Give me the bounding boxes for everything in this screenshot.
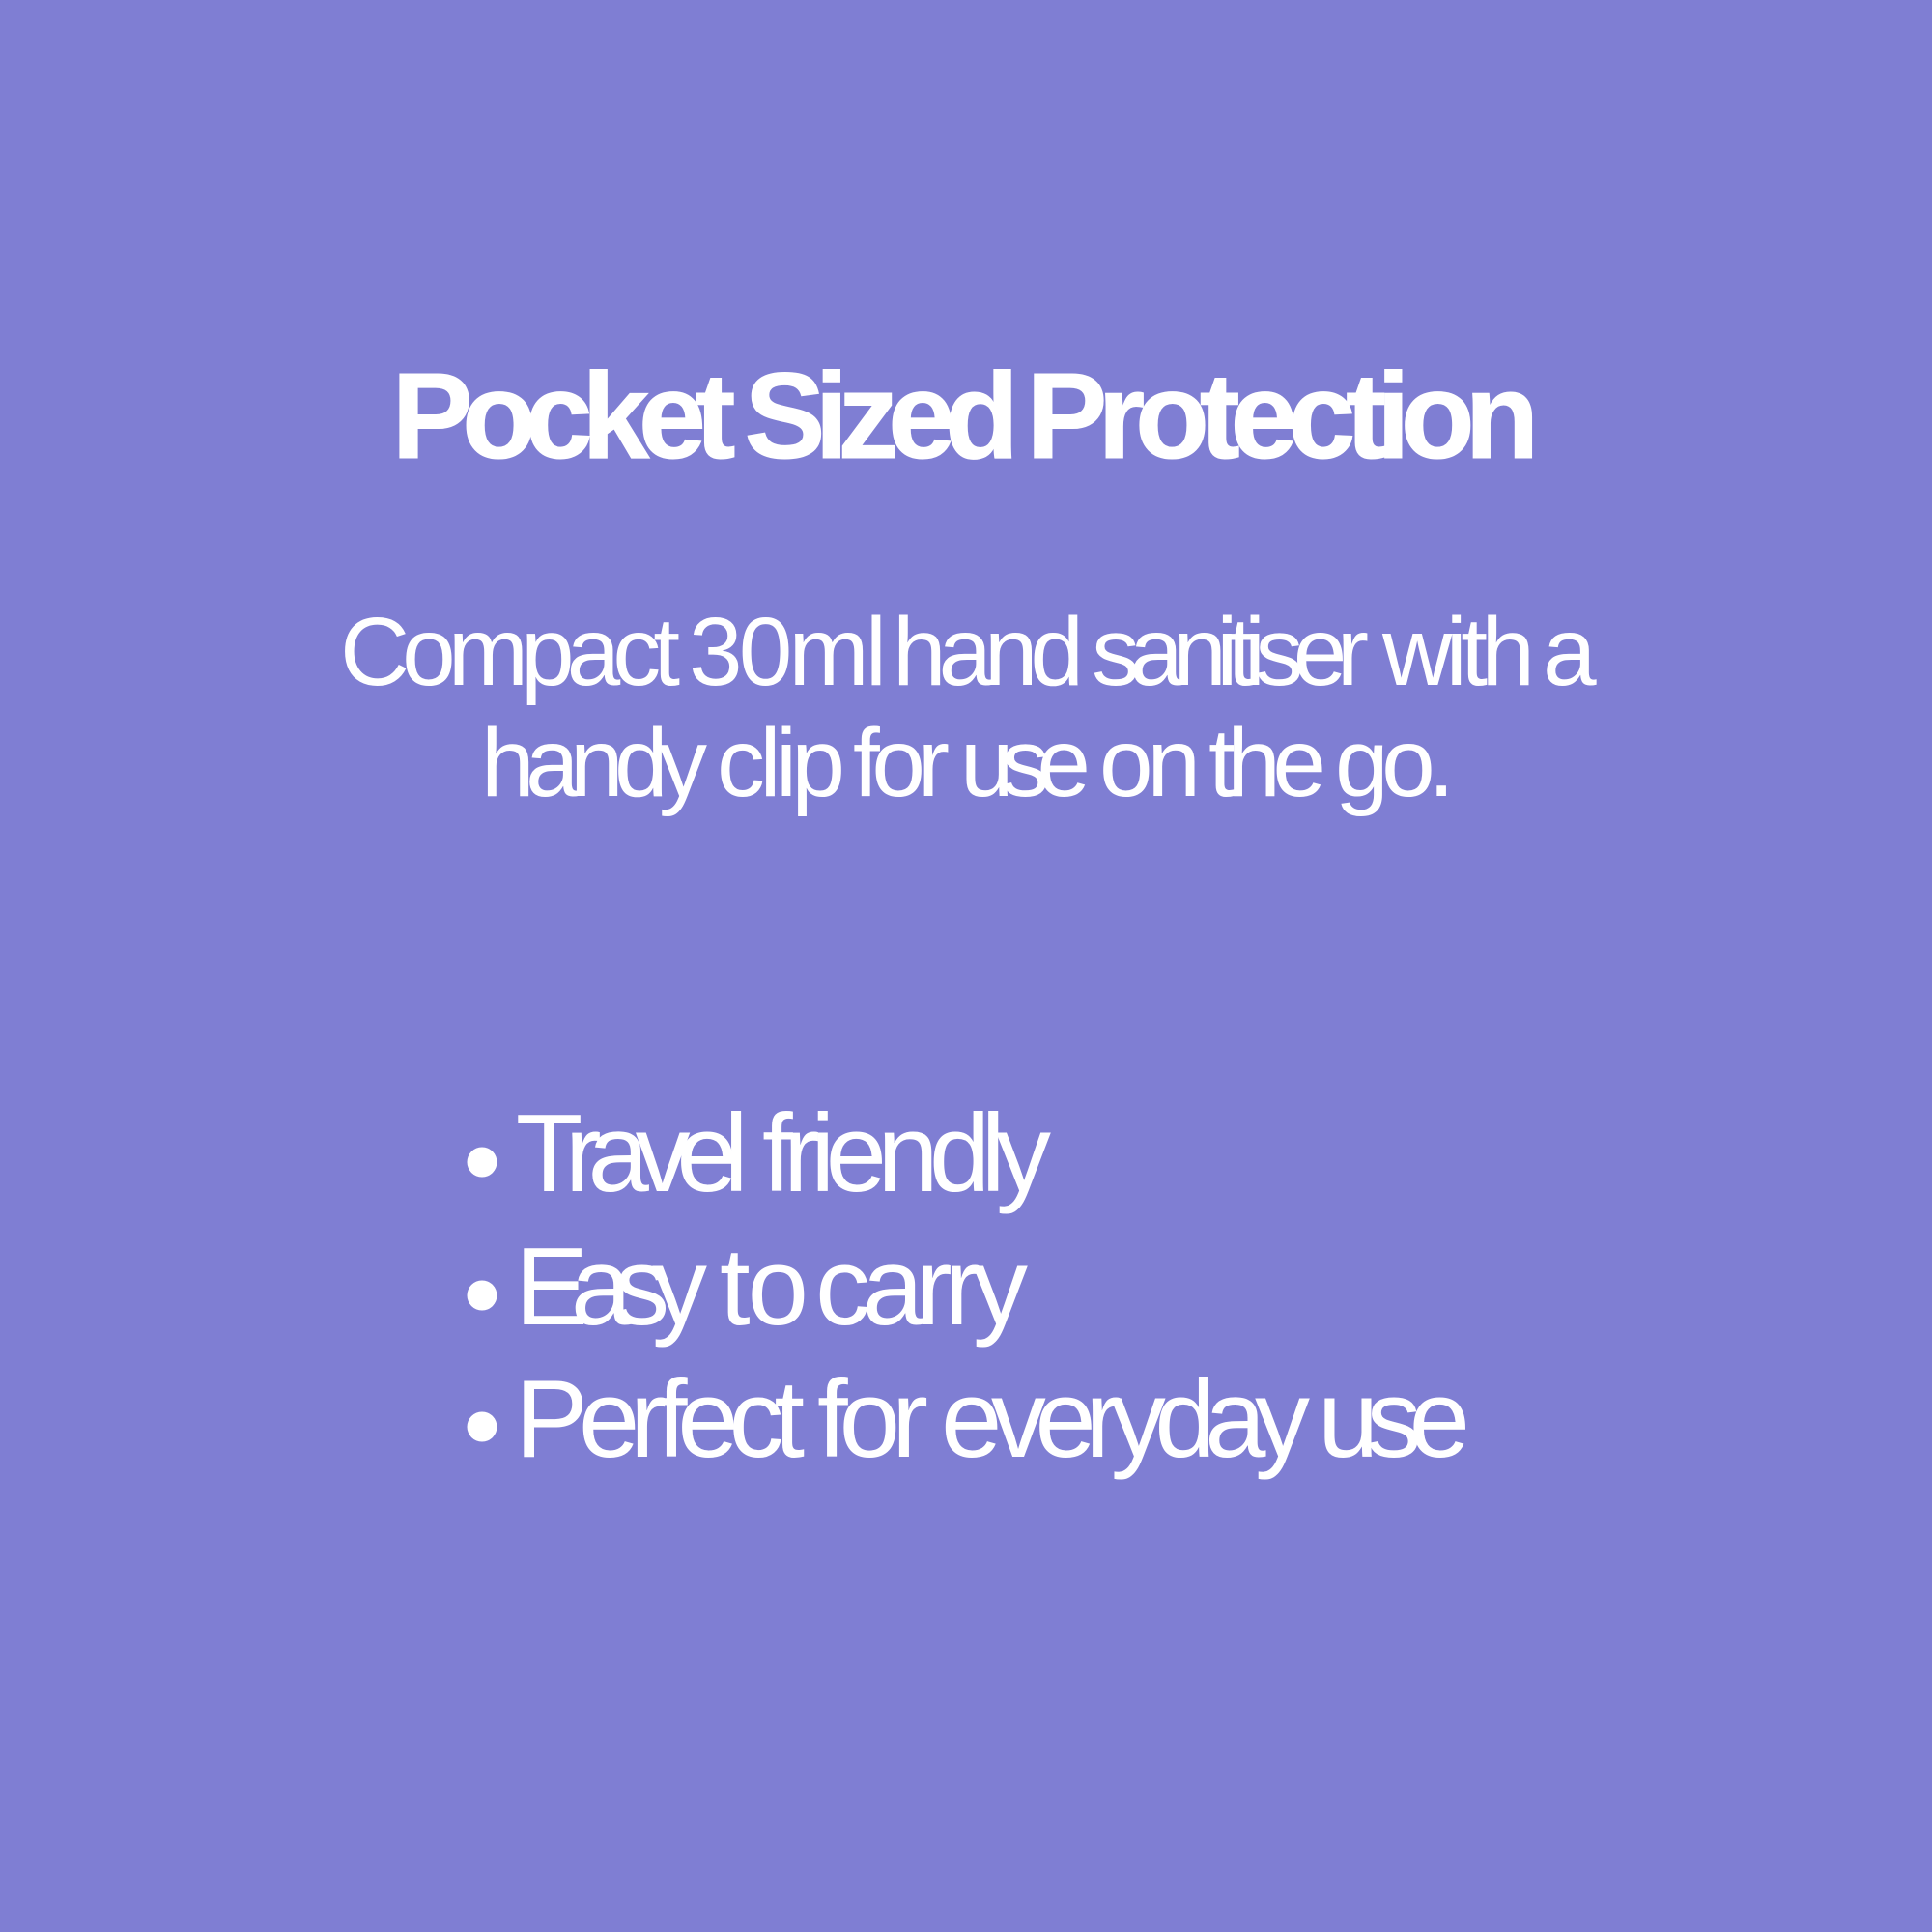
text block: product description: handy	[481, 709, 707, 817]
title: Pocket	[392, 348, 736, 484]
bullet list: product benefits: Perfect	[515, 1358, 805, 1481]
text block: product description	[340, 598, 1597, 817]
bullet list: product benefits: everyday	[941, 1358, 1310, 1481]
text block: product description: sanitiser	[1092, 598, 1369, 706]
text block: product description: the	[1208, 709, 1326, 817]
text block: product description: use	[960, 709, 1091, 817]
text block: product description: for	[853, 709, 950, 817]
bullet list: product benefits: Easy	[515, 1226, 707, 1349]
bullet list: product benefits: friendly	[762, 1093, 1051, 1215]
text block: product description: hand	[893, 598, 1084, 706]
title: Protection	[1026, 348, 1539, 484]
bullet list: product benefits: to	[720, 1226, 809, 1349]
bullet list: product benefits: carry	[815, 1226, 1028, 1349]
bullet list: product benefits: use	[1318, 1358, 1470, 1481]
text block: product description: Compact	[340, 598, 680, 706]
bullet list: product benefits	[468, 1093, 1470, 1481]
title: Sized	[744, 348, 1019, 484]
text block: product description: a	[1543, 598, 1597, 706]
text block: product description: go.	[1335, 709, 1455, 817]
text block: product description: clip	[717, 709, 845, 817]
title	[392, 348, 1539, 484]
text block: product description: with	[1381, 598, 1535, 706]
bullet list: product benefits: for	[817, 1358, 928, 1481]
text block: product description: 30ml	[689, 598, 887, 706]
text block: product description: on	[1099, 709, 1201, 817]
bullet list: product benefits: Travel	[516, 1093, 749, 1215]
